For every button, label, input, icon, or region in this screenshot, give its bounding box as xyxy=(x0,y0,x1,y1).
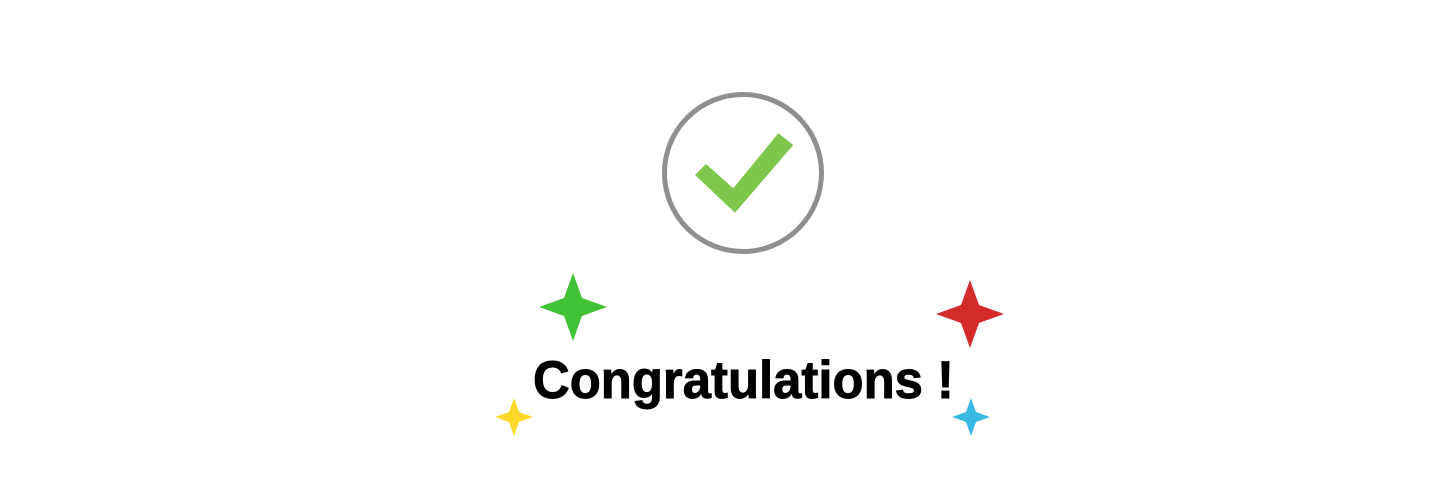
icon: blue sparkle xyxy=(952,398,990,436)
icon: yellow sparkle xyxy=(495,398,533,436)
icon: green sparkle xyxy=(539,273,607,341)
icon: red sparkle xyxy=(936,280,1004,348)
heading: congratulations: Congratulations ! xyxy=(533,351,954,410)
icon: check mark in circle xyxy=(664,94,822,252)
